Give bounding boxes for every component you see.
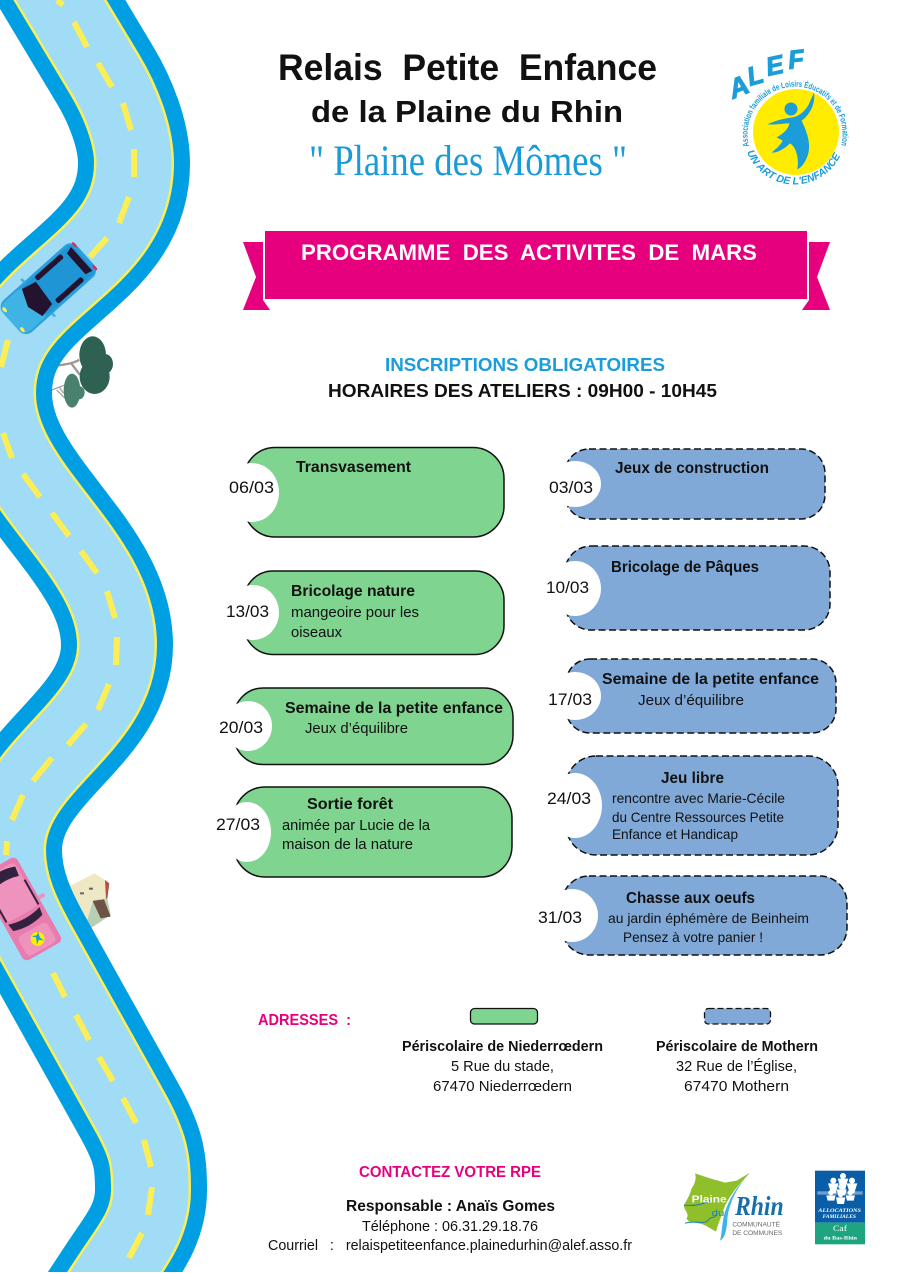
icon: trees beside the road [52,336,113,408]
card: 24/03 Jeu libre: 24/03 [547,790,591,808]
card: 27/03 Sortie forêt: animée par Lucie de la [282,818,431,834]
icon: CAF logo: Caf [833,1224,847,1233]
banner: programme [243,230,830,310]
contact block [268,1164,632,1254]
card: 06/03 Transvasement: 06/03 [229,479,274,497]
card: 31/03 Chasse aux oeufs [538,876,847,955]
icon: pink car [0,853,69,962]
title: " Plaine des Mômes " [309,138,627,185]
card: 13/03 Bricolage nature [226,571,504,654]
icon: ALEF logo: UN ART DE L'ENFANCE [748,150,840,184]
heading: inscriptions: INSCRIPTIONS OBLIGATOIRES [385,354,665,375]
road [0,0,152,1273]
icon: ALEF logo [723,43,849,184]
icon: blue car [0,236,102,341]
card: 13/03 Bricolage nature: Bricolage nature [291,583,415,600]
card: 24/03 Jeu libre: Jeu libre [661,770,724,787]
card: 10/03 Bricolage de Pâques: Bricolage de Pâques [611,559,759,576]
icon: CAF logo: ALLOCATIONS [817,1209,862,1214]
title: de la Plaine du Rhin [311,94,623,129]
card: 13/03 Bricolage nature: 13/03 [226,603,269,621]
card: 27/03 Sortie forêt: 27/03 [216,816,260,834]
icon: ALEF logo: L [743,59,767,92]
card: 03/03 Jeux de construction [549,449,825,519]
card: 17/03 Semaine de la petite enfance: 17/03 [548,691,592,709]
card: 24/03 Jeu libre [547,756,838,855]
icon: house beside the road [70,873,111,928]
card: 20/03 Semaine de la petite enfance: Jeux d’équilibre [305,721,408,737]
card: 17/03 Semaine de la petite enfance [548,659,836,733]
card: 24/03 Jeu libre: Enfance et Handicap [612,826,738,842]
card: 20/03 Semaine de la petite enfance: 20/03 [219,719,263,737]
card: 03/03 Jeux de construction: Jeux de construction [615,460,769,477]
contact block: CONTACTEZ VOTRE RPE [359,1164,541,1181]
card: 17/03 Semaine de la petite enfance: Semaine de la petite enfance [602,671,819,688]
title [278,47,657,185]
icon: ALEF logo: A [723,69,753,105]
card: 27/03 Sortie forêt: maison de la nature [282,837,413,853]
card: 27/03 Sortie forêt [216,787,512,877]
icon: Plaine du Rhin logo: COMMUNAUTÉ [732,1220,781,1229]
icon: ALEF logo: E [763,49,787,82]
legend: Mothern address: 32 Rue de l’Église, [676,1058,797,1075]
icon: Plaine du Rhin logo: du [712,1208,724,1218]
heading: adresses: ADRESSES : [258,1012,351,1029]
card: 20/03 Semaine de la petite enfance: Semaine de la petite enfance [285,700,503,717]
legend: Niederrœdern address: 5 Rue du stade, [451,1059,554,1075]
icon: Plaine du Rhin logo: Rhin [734,1191,784,1221]
icon: Plaine du Rhin logo: Plaine [692,1195,727,1206]
card: 24/03 Jeu libre: du Centre Ressources Petite [612,809,784,825]
icon: CAF logo: FAMILIALES [823,1215,856,1220]
icon: CAF logo [815,1171,865,1244]
icon: ALEF logo: Association familiale de Loisirs Éducatifs et de Formation [742,80,849,146]
heading: horaires: HORAIRES DES ATELIERS : 09H00 - 10H45 [328,380,717,401]
card: 31/03 Chasse aux oeufs: 31/03 [538,909,582,927]
icon: ALEF logo: F [786,43,807,75]
legend: Mothern address: 67470 Mothern [684,1079,789,1095]
legend: Mothern address: Périscolaire de Mothern [656,1039,818,1055]
card: 17/03 Semaine de la petite enfance: Jeux d’équilibre [638,693,744,709]
card: 10/03 Bricolage de Pâques [546,546,830,630]
legend: Niederrœdern address: Périscolaire de Niederrœdern [402,1039,603,1055]
card: 27/03 Sortie forêt: Sortie forêt [307,796,393,813]
legend: Niederrœdern address [402,1008,603,1095]
card: 31/03 Chasse aux oeufs: Pensez à votre panier ! [623,929,763,945]
card: 06/03 Transvasement [225,448,504,537]
contact block: Téléphone : 06.31.29.18.76 [362,1219,538,1235]
icon: Plaine du Rhin logo [684,1173,784,1241]
legend: Mothern address [656,1008,818,1095]
card: 03/03 Jeux de construction: 03/03 [549,479,593,497]
icon: Plaine du Rhin logo: DE COMMUNES [732,1230,783,1237]
card: 10/03 Bricolage de Pâques: 10/03 [546,579,589,597]
card: 13/03 Bricolage nature: oiseaux [291,625,343,641]
card: 20/03 Semaine de la petite enfance [219,688,513,764]
contact block: Responsable : Anaïs Gomes [346,1198,555,1215]
title: Relais Petite Enfance [278,47,657,88]
card: 31/03 Chasse aux oeufs: au jardin éphémère de Beinheim [608,910,809,926]
icon: CAF logo: du Bas-Rhin [824,1236,857,1241]
banner: programme: PROGRAMME DES ACTIVITES DE MARS [301,240,757,265]
contact block: Courriel : relaispetiteenfance.plainedurhin@alef.asso.fr [268,1238,632,1254]
legend: Niederrœdern address: 67470 Niederrœdern [433,1079,572,1095]
card: 06/03 Transvasement: Transvasement [296,459,411,476]
card: 13/03 Bricolage nature: mangeoire pour les [291,605,419,621]
card: 31/03 Chasse aux oeufs: Chasse aux oeufs [626,890,755,907]
card: 24/03 Jeu libre: rencontre avec Marie-Cécile [612,790,785,806]
